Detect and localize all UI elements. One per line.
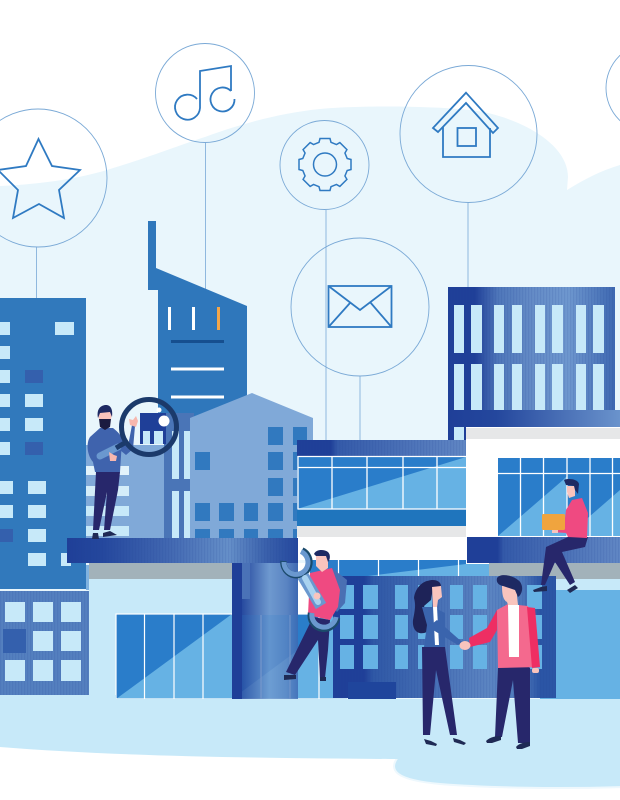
person: sitting man with box: [533, 479, 588, 593]
hair: [314, 550, 330, 562]
ground: [0, 695, 620, 759]
connector lines: [36, 142, 468, 440]
hair: [413, 580, 441, 633]
gabled building: [190, 393, 313, 538]
magnifier handle: [100, 441, 128, 456]
shirt: [508, 605, 519, 657]
handshake: [460, 641, 470, 650]
right white building: [466, 427, 620, 564]
torso: [552, 498, 588, 538]
top right tower: [448, 287, 620, 441]
person: man with magnifying glass: [88, 400, 176, 539]
background blob: [0, 106, 620, 720]
jacket: [497, 604, 540, 668]
leg: [541, 537, 588, 585]
hand: [314, 592, 320, 600]
person: woman shaking hands: [413, 580, 466, 746]
tall tower behind: [148, 221, 247, 420]
person: man shaking hands: [460, 575, 540, 749]
window strip under middle building: [310, 560, 489, 615]
torso: [308, 568, 340, 620]
backpack: [328, 568, 347, 612]
icon: partial circle at right edge: [606, 43, 620, 133]
platform and pillar: [67, 538, 298, 699]
shoes: [284, 675, 326, 681]
magnifier ring: [122, 400, 176, 454]
hair: [564, 479, 579, 494]
shirt: [433, 607, 439, 645]
arm: [428, 620, 462, 645]
box: [542, 514, 565, 530]
lower right building: [333, 576, 556, 699]
wrench: [283, 550, 337, 629]
middle building: [297, 440, 466, 560]
icon: star in circle: [0, 109, 107, 247]
shoes: [533, 585, 578, 593]
neck and face: [98, 408, 112, 424]
hair: [98, 405, 112, 418]
hand: [552, 530, 558, 533]
holding hand: [109, 452, 117, 461]
sleeve: [527, 607, 540, 668]
person: man with wrench: [283, 550, 347, 681]
right lower strip: [489, 563, 620, 700]
head: [567, 486, 575, 498]
side hand: [532, 668, 539, 673]
head: [316, 555, 328, 572]
icon: envelope in circle: [291, 238, 429, 376]
shoes: [92, 531, 117, 539]
pants: [422, 647, 457, 735]
central lower building body: [89, 563, 342, 700]
shoes: [424, 738, 466, 746]
face: [432, 586, 442, 607]
extended arm: [469, 610, 497, 647]
ground shadow ellipse: [394, 757, 620, 788]
magnifier lens content: [140, 408, 170, 444]
beard: [99, 419, 111, 430]
legs: [93, 472, 120, 530]
left lower block: [0, 591, 89, 695]
face: [502, 585, 518, 605]
icon: gear in circle: [280, 120, 369, 210]
shoes: [486, 736, 530, 749]
left tower: [0, 298, 89, 590]
icon: house in circle: [400, 66, 537, 202]
jacket: [422, 607, 445, 647]
sweater: [88, 428, 122, 472]
raised arm: [120, 425, 135, 455]
icon: music note in circle: [156, 44, 254, 142]
light building behind man: [86, 445, 164, 538]
large window: [116, 614, 348, 699]
legs: [286, 617, 330, 678]
raised hand: [129, 416, 138, 427]
column with windows: [164, 413, 194, 538]
hair: [497, 575, 522, 597]
pants: [495, 657, 530, 743]
